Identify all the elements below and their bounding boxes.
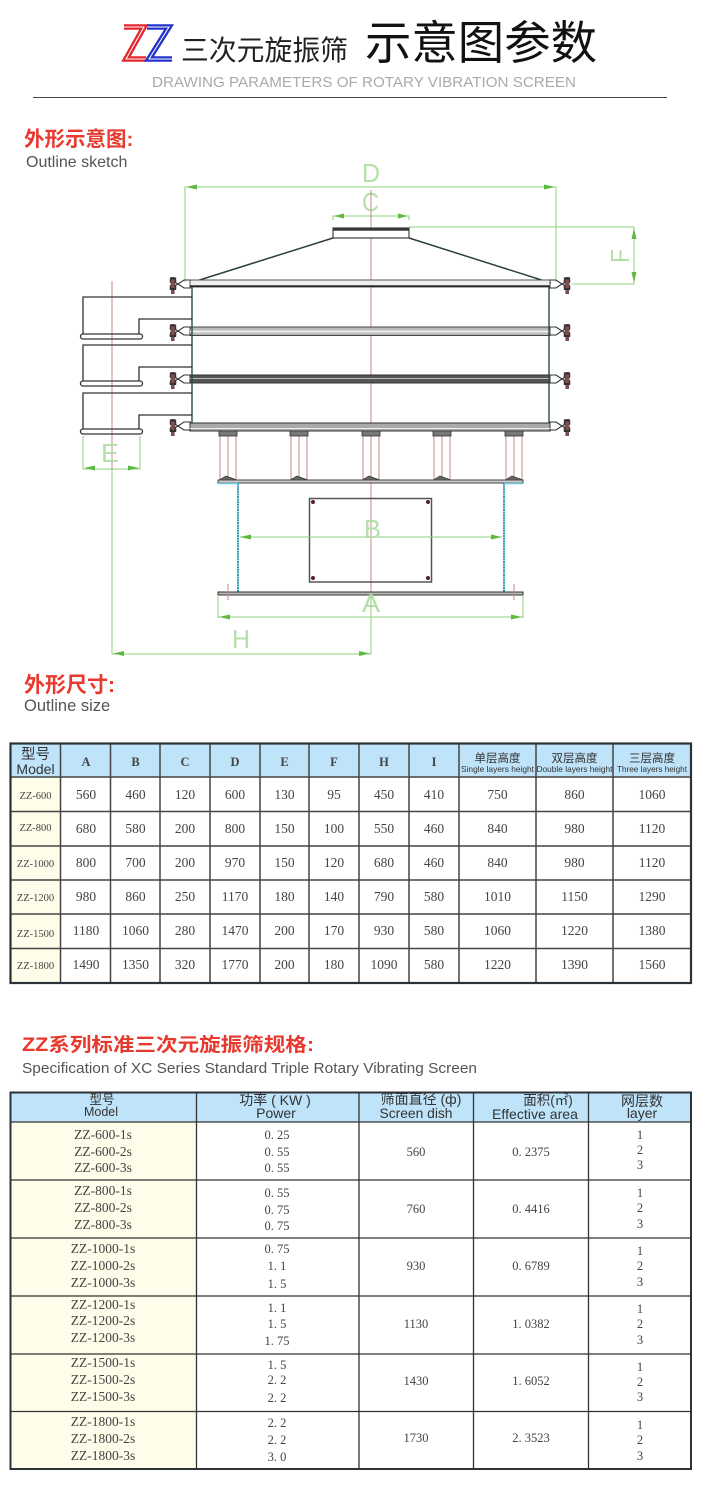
table header: B: [131, 755, 140, 769]
row: ZZ-600: ZZ-600: [19, 791, 52, 802]
row: ZZ-1000: [17, 855, 665, 870]
heading: specification: ZZ系列标准三次元旋振筛规格:: [22, 1033, 314, 1056]
table grid: [10, 1092, 691, 1469]
heading: specification: [22, 1033, 477, 1077]
row: ZZ-1500: 930: [374, 923, 394, 938]
row: ZZ-1000: 980: [564, 855, 585, 870]
table: outline size: [10, 743, 691, 983]
row: ZZ-800: 680: [76, 821, 96, 836]
row: ZZ-1000: 970: [225, 855, 245, 870]
rows: ZZ-1200: 1. 1: [268, 1301, 286, 1315]
rows: ZZ-1000: 2: [637, 1259, 643, 1273]
rows: ZZ-1000: 1. 5: [268, 1277, 286, 1291]
dimension C: C: [362, 187, 379, 217]
rows: ZZ-1000: 1: [637, 1244, 643, 1258]
row: ZZ-600: 750: [487, 787, 508, 802]
row: ZZ-1000: 800: [76, 855, 96, 870]
rows: ZZ-600: 0. 2375: [512, 1145, 550, 1159]
rows: ZZ-600: ZZ-600-2s: [74, 1144, 132, 1159]
rows: ZZ-800: 2: [637, 1201, 643, 1215]
rows: ZZ-1500: 2. 2: [268, 1373, 286, 1387]
row: ZZ-1500: 200: [274, 923, 295, 938]
rows: ZZ-800: 1: [637, 1186, 643, 1200]
dimension D: [185, 158, 556, 282]
table header: 单层高度: [474, 751, 521, 765]
clamp bolts: [170, 277, 570, 436]
row: ZZ-800: 100: [324, 821, 344, 836]
row: ZZ-1500: 1470: [222, 923, 249, 938]
center line: [370, 190, 372, 593]
rows: ZZ-600: 3: [637, 1158, 643, 1172]
row: ZZ-1500: 1180: [73, 923, 99, 938]
table header: layer: [627, 1105, 658, 1121]
rows: ZZ-600: 0. 55: [264, 1161, 290, 1175]
rows: ZZ-800: ZZ-800-1s: [74, 1183, 132, 1198]
row: ZZ-1200: 790: [374, 889, 394, 904]
rows: ZZ-1800: 2: [637, 1433, 643, 1447]
row: ZZ-1200: 1290: [638, 889, 666, 904]
row: ZZ-1000: 460: [424, 855, 444, 870]
discharge outlets: [80, 297, 192, 434]
rows: ZZ-800: [74, 1183, 643, 1233]
table header: Screen dish: [380, 1105, 452, 1121]
rows: ZZ-1500: [71, 1355, 643, 1405]
rows: ZZ-800: 3: [637, 1217, 643, 1231]
frame rings: [190, 280, 550, 431]
row: ZZ-1800: 200: [274, 957, 295, 972]
row: ZZ-1000: 840: [487, 855, 508, 870]
rows: ZZ-1000: [71, 1241, 643, 1291]
row: ZZ-800: ZZ-800: [19, 823, 52, 834]
table: specification: [10, 1091, 691, 1469]
access door: [310, 498, 432, 582]
table header: Double layers height: [536, 764, 613, 774]
rows: ZZ-1500: ZZ-1500-1s: [71, 1355, 135, 1370]
dimension B: B: [364, 514, 381, 544]
subtitle: DRAWING PARAMETERS OF ROTARY VIBRATION SCREEN: [152, 75, 576, 91]
heading: outline sketch: 外形示意图:: [24, 127, 133, 151]
rows: ZZ-1500: 1: [637, 1360, 643, 1374]
table header: A: [81, 755, 91, 769]
rows: ZZ-1200: 1. 0382: [512, 1317, 550, 1331]
rows: ZZ-1800: ZZ-1800-2s: [71, 1431, 135, 1446]
table header: I: [432, 755, 437, 769]
table header: E: [280, 755, 289, 769]
rows: ZZ-1000: 3: [637, 1275, 643, 1289]
rows: ZZ-1200: 1: [637, 1302, 643, 1316]
rows: ZZ-800: 0. 55: [264, 1186, 290, 1200]
row: ZZ-1000: 150: [274, 855, 295, 870]
rows: ZZ-1000: ZZ-1000-1s: [71, 1241, 135, 1256]
table header: Single layers height: [461, 764, 535, 774]
row: ZZ-1200: 1170: [222, 889, 248, 904]
row: ZZ-800: 580: [125, 821, 146, 836]
table header: Three layers height: [617, 764, 688, 774]
row: ZZ-1200: 180: [274, 889, 295, 904]
row: ZZ-1200: 860: [125, 889, 146, 904]
rows: ZZ-1800: 3: [637, 1449, 643, 1463]
body walls: [192, 287, 549, 423]
table header: 功率 ( KW ): [239, 1092, 311, 1108]
row: ZZ-1200: 980: [76, 889, 96, 904]
rows: ZZ-1500: 2: [637, 1375, 643, 1389]
rows: ZZ-1000: 930: [407, 1259, 425, 1273]
table header: 双层高度: [552, 751, 598, 765]
rows: ZZ-1800: 3. 0: [268, 1450, 286, 1464]
table header: F: [330, 755, 338, 769]
row: ZZ-1800: 1560: [638, 957, 666, 972]
dimension F: F: [605, 249, 635, 263]
row: ZZ-800: 550: [374, 821, 394, 836]
row: ZZ-800: 840: [487, 821, 508, 836]
row: ZZ-1200: 580: [424, 889, 444, 904]
rows: ZZ-1200: 1. 75: [264, 1334, 290, 1348]
rows: ZZ-1200: 1. 5: [268, 1317, 286, 1331]
rows: ZZ-1000: ZZ-1000-3s: [71, 1275, 135, 1290]
table header: 型号: [89, 1093, 115, 1107]
title: product name: 三次元旋振筛: [181, 35, 348, 66]
rows: ZZ-1800: 2. 3523: [512, 1431, 550, 1445]
table header: 网层数: [621, 1093, 663, 1109]
row: ZZ-1800: 1770: [222, 957, 249, 972]
table header: 筛面直径 (ф): [381, 1091, 461, 1107]
row: ZZ-1000: ZZ-1000: [17, 859, 54, 870]
rows: ZZ-600: ZZ-600-1s: [74, 1127, 132, 1142]
table header: Model: [16, 761, 55, 777]
heading: outline size: Outline size: [24, 697, 110, 715]
row: ZZ-1800: 580: [424, 957, 444, 972]
rows: ZZ-1000: 0. 75: [264, 1242, 290, 1256]
row: ZZ-1800: 1490: [72, 957, 100, 972]
rows: ZZ-1500: ZZ-1500-3s: [71, 1389, 135, 1404]
rows: ZZ-1800: ZZ-1800-1s: [71, 1414, 135, 1429]
table header: 型号: [21, 746, 50, 763]
rows: ZZ-800: 0. 75: [264, 1203, 290, 1217]
row: ZZ-800: 200: [175, 821, 195, 836]
row: ZZ-1500: ZZ-1500: [17, 929, 54, 940]
rows: ZZ-1500: ZZ-1500-2s: [71, 1372, 135, 1387]
row: ZZ-1500: 170: [324, 923, 344, 938]
dimension B: [240, 514, 502, 544]
rows: ZZ-1200: ZZ-1200-1s: [71, 1297, 135, 1312]
dimension C: [333, 187, 409, 220]
rows: ZZ-1800: 1730: [404, 1431, 428, 1445]
table header: Model: [84, 1105, 118, 1119]
row: ZZ-600: 1060: [638, 787, 666, 802]
row: ZZ-1800: 1220: [484, 957, 511, 972]
rows: ZZ-1200: 1130: [404, 1317, 428, 1331]
row: ZZ-1800: 320: [175, 957, 195, 972]
diagram: rotary vibration screen outline: [80, 158, 636, 656]
row: ZZ-1500: 580: [424, 923, 444, 938]
support legs: [219, 431, 523, 481]
rows: ZZ-1500: 3: [637, 1390, 643, 1404]
row: ZZ-1000: 200: [175, 855, 195, 870]
table header: Power: [256, 1105, 296, 1121]
rows: ZZ-600: 2: [637, 1143, 643, 1157]
rows: ZZ-600: ZZ-600-3s: [74, 1160, 132, 1175]
row: ZZ-1800: 1090: [370, 957, 398, 972]
table header: Effective area: [492, 1106, 578, 1122]
row: ZZ-1500: 1220: [561, 923, 588, 938]
rows: ZZ-1200: 3: [637, 1333, 643, 1347]
row: ZZ-1200: 1010: [484, 889, 511, 904]
row: ZZ-800: 800: [225, 821, 245, 836]
rows: ZZ-1000: 0. 6789: [512, 1259, 550, 1273]
rows: ZZ-1000: ZZ-1000-2s: [71, 1258, 135, 1273]
row: ZZ-1500: 1060: [484, 923, 511, 938]
dimension A: A: [362, 588, 381, 618]
heading: specification: Specification of XC Series Standard Triple Rotary Vibrating Screen: [22, 1061, 477, 1077]
dimension D: D: [362, 158, 380, 188]
row: ZZ-800: 150: [274, 821, 295, 836]
row: ZZ-600: 460: [125, 787, 146, 802]
rows: ZZ-800: ZZ-800-2s: [74, 1200, 132, 1215]
rows: ZZ-800: ZZ-800-3s: [74, 1217, 132, 1232]
rows: ZZ-1200: [71, 1297, 643, 1348]
rows: ZZ-600: 560: [407, 1145, 425, 1159]
rows: ZZ-1200: ZZ-1200-2s: [71, 1313, 135, 1328]
row: ZZ-1200: 250: [175, 889, 195, 904]
rows: ZZ-1800: [71, 1414, 643, 1464]
icon: ZZ logo: [124, 27, 172, 59]
row: ZZ-600: 860: [564, 787, 585, 802]
row: ZZ-1500: [17, 923, 666, 940]
dimension E: E: [101, 438, 119, 468]
table fills: [10, 743, 691, 983]
heading: outline size: 外形尺寸:: [24, 674, 115, 697]
header: [33, 17, 667, 98]
rows: ZZ-1200: ZZ-1200-3s: [71, 1330, 135, 1345]
rows: ZZ-1800: 1: [637, 1418, 643, 1432]
rows: ZZ-1500: 2. 2: [268, 1391, 286, 1405]
table header: [16, 746, 688, 777]
row: ZZ-1800: [17, 957, 666, 972]
row: ZZ-600: 450: [374, 787, 394, 802]
row: ZZ-1200: 1150: [561, 889, 588, 904]
table header: 面积(㎡): [523, 1093, 573, 1108]
row: ZZ-800: 1120: [639, 821, 665, 836]
row: ZZ-1800: 180: [324, 957, 344, 972]
motor base: [218, 480, 523, 600]
row: ZZ-1800: 1350: [122, 957, 149, 972]
table grid: [10, 743, 691, 983]
dimension A: [218, 588, 523, 620]
row: ZZ-1000: 700: [125, 855, 146, 870]
table fills: [10, 1092, 691, 1469]
row: ZZ-1800: ZZ-1800: [17, 961, 54, 972]
row: ZZ-1800: 1390: [561, 957, 588, 972]
rows: ZZ-800: 760: [407, 1202, 425, 1216]
row: ZZ-800: [19, 821, 665, 836]
heading: outline size: [24, 674, 115, 715]
row: ZZ-600: 560: [76, 787, 96, 802]
row: ZZ-1500: 1380: [638, 923, 666, 938]
table header: [84, 1091, 663, 1122]
table header: H: [379, 755, 389, 769]
rows: ZZ-1500: 1. 5: [268, 1358, 286, 1372]
row: ZZ-600: 120: [175, 787, 195, 802]
rows: ZZ-1500: 1430: [404, 1374, 428, 1388]
heading: outline sketch: [24, 127, 133, 171]
rows: ZZ-800: 0. 75: [264, 1219, 290, 1233]
row: ZZ-800: 460: [424, 821, 444, 836]
row: ZZ-600: 600: [225, 787, 245, 802]
rows: ZZ-1800: 2. 2: [268, 1433, 286, 1447]
top cover: [190, 228, 551, 283]
rows: ZZ-1200: 2: [637, 1317, 643, 1331]
table header: C: [180, 755, 190, 769]
row: ZZ-1000: 680: [374, 855, 394, 870]
dimension H: H: [232, 624, 250, 654]
rows: ZZ-600: [74, 1127, 643, 1175]
rows: ZZ-1000: 1. 1: [268, 1259, 286, 1273]
table header: 三层高度: [629, 751, 675, 765]
dimension H: [112, 470, 371, 656]
row: ZZ-1200: ZZ-1200: [17, 893, 54, 904]
row: ZZ-1200: 140: [324, 889, 344, 904]
row: ZZ-600: 95: [327, 787, 341, 802]
row: ZZ-600: 130: [274, 787, 295, 802]
rows: ZZ-600: 0. 55: [264, 1145, 290, 1159]
row: ZZ-1500: 1060: [122, 923, 149, 938]
row: ZZ-1000: 1120: [639, 855, 665, 870]
rows: ZZ-1800: ZZ-1800-3s: [71, 1448, 135, 1463]
row: ZZ-1200: [17, 889, 666, 904]
row: ZZ-800: 980: [564, 821, 585, 836]
table header: D: [230, 755, 240, 769]
dimension F: [409, 227, 636, 284]
row: ZZ-600: [19, 787, 666, 802]
rows: ZZ-1800: 2. 2: [268, 1416, 286, 1430]
rows: ZZ-600: 0. 25: [264, 1128, 290, 1142]
row: ZZ-600: 410: [424, 787, 444, 802]
title: drawing parameters: 示意图参数: [365, 17, 597, 69]
rows: ZZ-1500: 1. 6052: [512, 1374, 550, 1388]
row: ZZ-1500: 280: [175, 923, 195, 938]
heading: outline sketch: Outline sketch: [26, 154, 127, 171]
rows: ZZ-800: 0. 4416: [512, 1202, 550, 1216]
dimension E: [83, 436, 140, 470]
rows: ZZ-600: 1: [637, 1128, 643, 1142]
row: ZZ-1000: 120: [324, 855, 344, 870]
